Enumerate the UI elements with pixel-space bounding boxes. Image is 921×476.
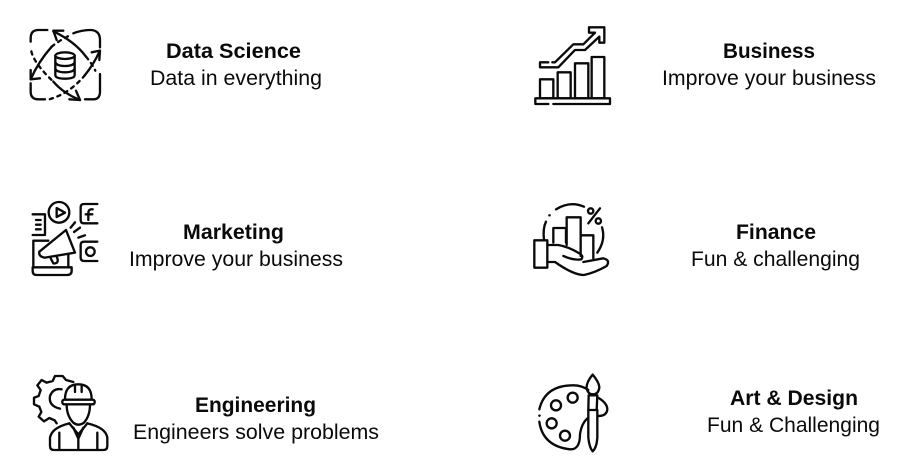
heading: Art & Design: Art & Design	[730, 387, 858, 410]
icon: megaphone and social media	[33, 202, 97, 275]
heading: Data Science: Data Science	[166, 40, 301, 63]
text: Engineers solve problems: Engineers solve problems	[133, 421, 379, 444]
icon: engineer with gear	[34, 376, 107, 450]
panel: Engineering	[34, 376, 379, 450]
icon: data atoms	[31, 30, 100, 100]
icon: hand holding chart	[534, 204, 608, 275]
panel: Data Science	[31, 30, 322, 100]
text: Fun & Challenging: Fun & Challenging	[707, 414, 880, 437]
text: Fun & challenging: Fun & challenging	[691, 248, 860, 271]
icon: rising bar chart	[535, 27, 610, 104]
heading: Finance: Finance	[736, 221, 816, 244]
heading: Engineering: Engineering	[195, 394, 316, 417]
text: Improve your business: Improve your business	[129, 248, 343, 271]
text: Improve your business: Improve your business	[662, 67, 876, 90]
panel: Marketing	[33, 202, 343, 275]
panel: Finance	[534, 204, 860, 275]
heading: Marketing: Marketing	[183, 221, 284, 244]
heading: Business: Business	[723, 40, 815, 63]
panel: Art & Design	[539, 375, 880, 451]
text: Data in everything: Data in everything	[150, 67, 322, 90]
panel: Business	[535, 27, 876, 104]
icon: palette and brush	[539, 375, 607, 451]
